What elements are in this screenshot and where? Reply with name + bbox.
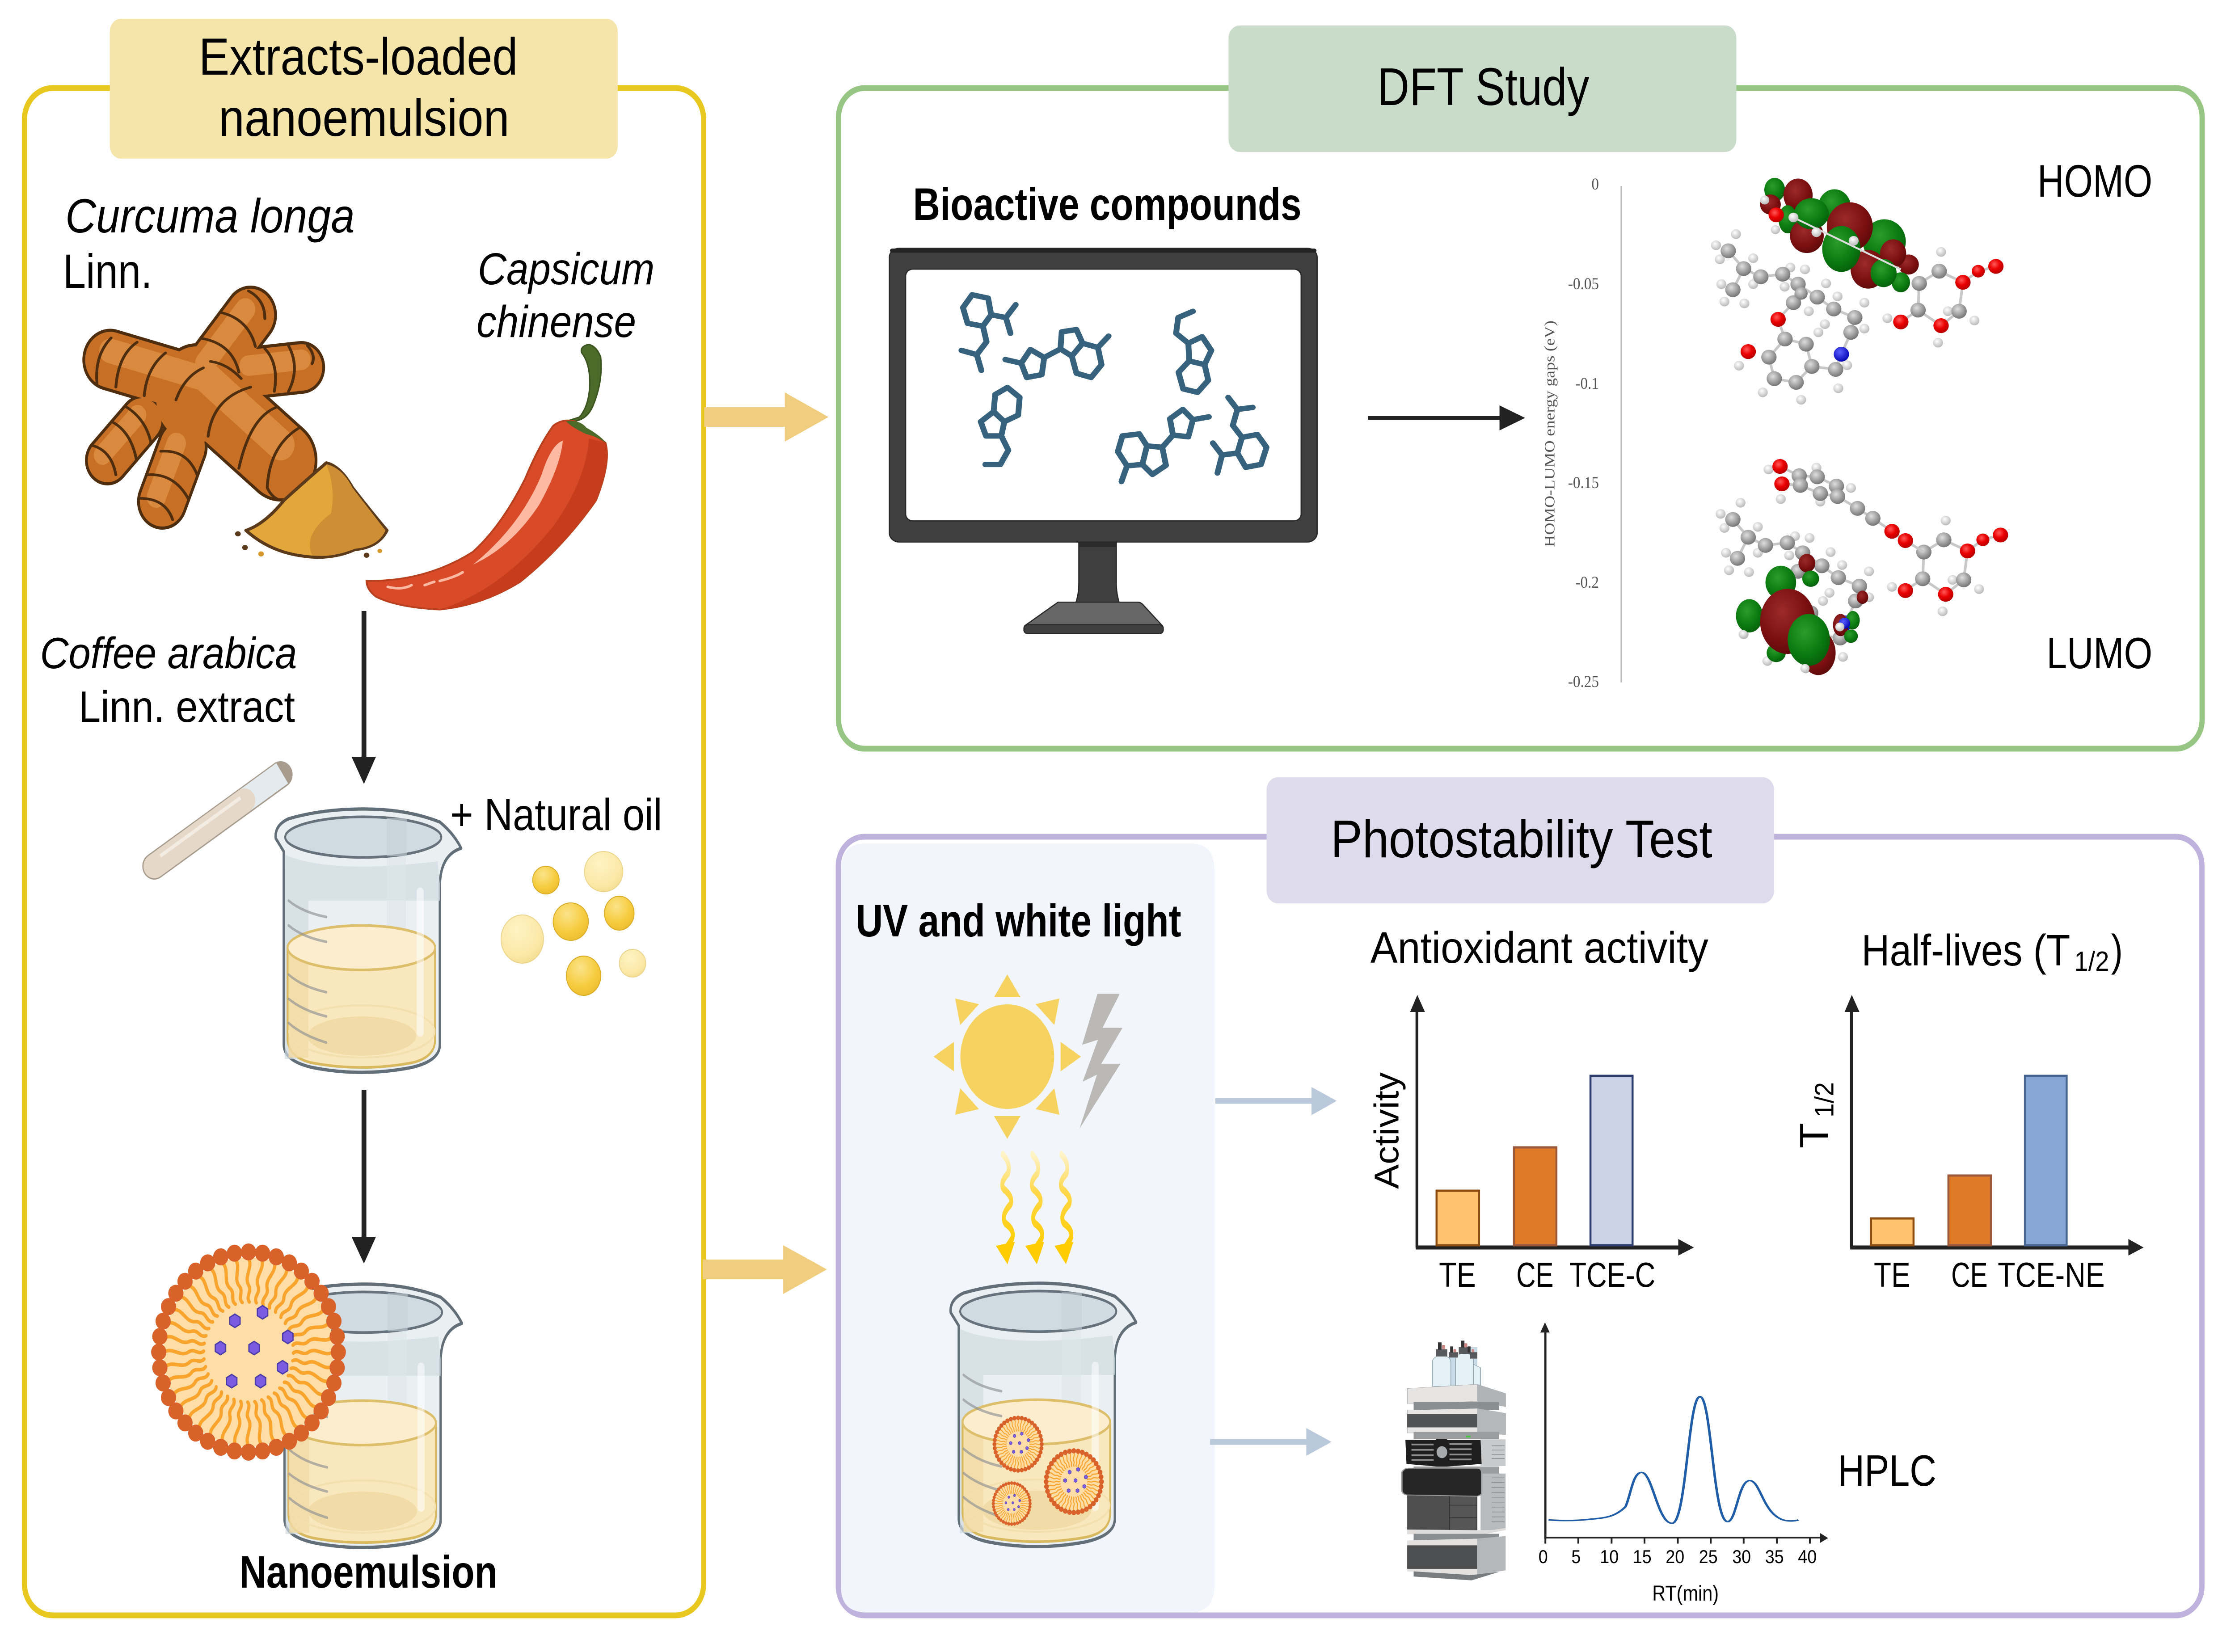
sub-panel: UV and white light [841,843,1214,1612]
heading: DFT Study [1228,25,1737,152]
label: Capsicum chinense: chinense [477,297,636,347]
bar chart: antioxidant activity: CE [1516,1255,1554,1294]
chart: HOMO-LUMO energy gaps axis [1542,175,1621,691]
chart: HPLC chromatogram: 30 [1732,1547,1751,1567]
chart: HOMO-LUMO energy gaps axis: 0 [1591,175,1599,193]
icon: wavy light arrows [996,1155,1073,1264]
label: Curcuma longa Linn. [63,189,355,298]
panel: DFT study [839,25,2202,749]
heading: half-lives: 1/2 [2074,946,2109,977]
figure: HOMO orbital molecule [1711,178,2003,405]
figure: LUMO orbital molecule [1716,459,2008,675]
chart: HOMO-LUMO energy gaps axis: -0.2 [1575,573,1599,591]
arrow: beaker to nanoemulsion [351,1090,376,1264]
arrow: compounds to orbitals [1368,405,1525,430]
heading: half-lives: Half-lives (T [1861,926,2070,975]
panel: photostability test [838,777,2202,1615]
icon: turmeric rhizome [90,291,313,520]
heading: extracts-loaded nanoemulsion: Extracts-loaded [199,27,518,86]
chart: HOMO-LUMO energy gaps axis: HOMO-LUMO energy gaps (eV) [1542,320,1558,547]
label: Coffee arabica Linn. extract: Linn. extract [79,683,295,731]
chart: HOMO-LUMO energy gaps axis: -0.1 [1575,374,1599,392]
heading: extracts-loaded nanoemulsion [110,19,618,159]
bar chart: half-lives: 1/2 [1810,1082,1839,1117]
molecules on screen [961,295,1266,481]
chart: HPLC chromatogram: RT(min) [1652,1581,1719,1606]
arrow: to DFT study [704,392,828,442]
chart: HPLC chromatogram: 10 [1600,1547,1619,1567]
icon: computer monitor with molecules [890,249,1317,633]
icon: nanoemulsion beaker [276,1284,462,1547]
heading: antioxidant activity: Antioxidant activity [1371,923,1708,972]
bar chart: half-lives: TCE-NE [1998,1255,2105,1294]
label: + Natural oil: + Natural oil [450,790,662,840]
chart: HPLC chromatogram: 0 [1539,1547,1548,1567]
icon: beaker with nanoemulsion droplets [951,1283,1136,1547]
label: Nanoemulsion: Nanoemulsion [239,1546,498,1597]
icon: red chili pepper [367,344,607,610]
chart: HPLC chromatogram: 25 [1699,1547,1718,1567]
heading: extracts-loaded nanoemulsion: nanoemulsion [219,88,510,147]
label: UV and white light: UV and white light [856,895,1181,946]
panel: extracts-loaded nanoemulsion [25,19,704,1615]
icon: oil droplets [501,851,646,995]
heading: half-lives: ) [2111,926,2123,975]
heading: Photostability Test: Photostability Test [1331,809,1712,868]
icon: micelles in beaker [988,1411,1109,1530]
chart: HOMO-LUMO energy gaps axis: -0.25 [1568,672,1599,691]
icon: micelle [135,1225,362,1479]
bar chart: half-lives: CE [1951,1255,1988,1294]
chart: HPLC chromatogram: 35 [1765,1547,1784,1567]
chart: HPLC chromatogram: 5 [1571,1547,1581,1567]
icon: lightning bolt [1080,994,1122,1129]
arrow: light to HPLC [1210,1428,1332,1456]
solvent bottles [1432,1340,1480,1386]
bar chart: half-lives [1792,995,2144,1294]
arrow: light to charts [1215,1087,1337,1115]
heading: DFT Study: DFT Study [1377,57,1590,116]
label: Bioactive compounds: Bioactive compounds [913,178,1302,230]
arrow: plant extracts to beaker [351,611,376,784]
chart: HPLC chromatogram: 20 [1666,1547,1684,1567]
bar chart: antioxidant activity: Activity [1368,1072,1406,1189]
instrument stack [1402,1384,1505,1580]
icon: beaker with extract [276,809,461,1072]
label: Coffee arabica Linn. extract: Coffee arabica [40,629,297,678]
label: HOMO: HOMO [2037,155,2152,206]
icon: test tube [154,773,282,866]
heading: Photostability Test [1267,777,1774,903]
bar chart: half-lives: TE [1874,1255,1910,1294]
label: LUMO: LUMO [2047,629,2152,678]
chart: HPLC chromatogram: 40 [1798,1547,1817,1567]
label: Curcuma longa Linn.: Linn. [63,244,152,298]
chart: HOMO-LUMO energy gaps axis: -0.15 [1568,473,1599,492]
label: HPLC: HPLC [1838,1446,1936,1495]
icon: sun [933,974,1081,1139]
icon: turmeric powder [235,463,387,558]
bar chart: antioxidant activity: TCE-C [1569,1255,1655,1294]
arrow: to photostability test [703,1245,827,1294]
chart: HOMO-LUMO energy gaps axis: -0.05 [1568,274,1599,293]
chart: HPLC chromatogram [1539,1322,1828,1606]
label: Coffee arabica Linn. extract [40,629,297,731]
bar chart: antioxidant activity: TE [1439,1255,1476,1294]
chart: HPLC chromatogram: 15 [1633,1547,1652,1567]
label: Capsicum chinense: Capsicum [478,244,654,294]
label: Capsicum chinense [477,244,654,347]
bar chart: half-lives: T [1792,1123,1837,1148]
label: Curcuma longa Linn.: Curcuma longa [65,189,355,243]
icon: HPLC instrument [1402,1340,1505,1580]
bar chart: antioxidant activity [1368,995,1694,1294]
